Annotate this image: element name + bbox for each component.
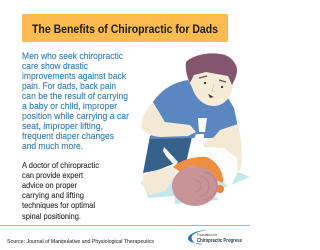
dad's neck and collar: [198, 118, 207, 132]
text block: back pain paragraph: pain. For dads, back pain: [22, 81, 116, 91]
baby's raised arm: [188, 134, 208, 158]
footer divider: [0, 225, 250, 226]
shirt sleeve edge: [153, 102, 172, 122]
text block: back pain paragraph: and much more.: [22, 141, 83, 151]
logo: Foundation for Chiropractic Progress: Foundation for: [197, 233, 218, 237]
changing mat: [140, 172, 250, 204]
text block: doctor advice paragraph: [22, 161, 99, 221]
baby's hair swirls: [195, 172, 217, 200]
dad's knee: [143, 166, 176, 195]
source citation: Source: Journal of Manipulative and Physiological Therapeutics: [7, 239, 154, 245]
logo: Foundation for Chiropractic Progress: [188, 230, 242, 244]
logo arc: [188, 230, 208, 244]
dad's nose and mouth: [212, 84, 215, 92]
text block: back pain paragraph: can be the result of carrying: [22, 91, 128, 101]
baby's body: [206, 147, 238, 188]
text block: doctor advice paragraph: spinal positioning.: [22, 212, 81, 221]
baby's orange shirt: [173, 157, 223, 183]
baby's bow: [216, 185, 224, 193]
text block: back pain paragraph: care show drastic: [22, 61, 88, 71]
text block: back pain paragraph: Men who seek chiropractic: [22, 51, 123, 61]
dad's hair: [186, 53, 237, 85]
dad's eyebrows: [199, 76, 226, 82]
baby's lowered arm: [163, 147, 178, 166]
text block: back pain paragraph: a baby or child, improper: [22, 101, 117, 111]
text block: doctor advice paragraph: advice on proper: [22, 181, 77, 190]
title banner: [22, 14, 228, 42]
baby's head: [172, 166, 218, 206]
dad's face: [190, 70, 233, 106]
dad's left arm: [141, 102, 196, 137]
logo: Foundation for Chiropractic Progress: Chiropractic Progress: [197, 238, 242, 244]
dad's eyes: [204, 82, 223, 88]
text block: doctor advice paragraph: A doctor of chiropractic: [22, 161, 99, 170]
dad's shirt: [150, 80, 238, 139]
text block: back pain paragraph: position while carrying a car: [22, 111, 129, 121]
text block: doctor advice paragraph: carrying and lifting: [22, 191, 84, 200]
infographic canvas: [0, 14, 250, 245]
text block: back pain paragraph: seat, improper lifting,: [22, 121, 103, 131]
text block: back pain paragraph: improvements against back: [22, 71, 126, 81]
title banner: The Benefits of Chiropractic for Dads: [32, 24, 218, 36]
baby's face: [186, 166, 213, 197]
text block: back pain paragraph: [22, 51, 129, 151]
text block: doctor advice paragraph: can provide expert: [22, 171, 84, 180]
dad's jeans: [143, 136, 192, 173]
text block: doctor advice paragraph: techniques for optimal: [22, 201, 95, 210]
illustration: dad changing a baby: [140, 53, 250, 206]
dad's right arm: [203, 124, 242, 176]
text block: back pain paragraph: frequent diaper changes: [22, 131, 114, 141]
